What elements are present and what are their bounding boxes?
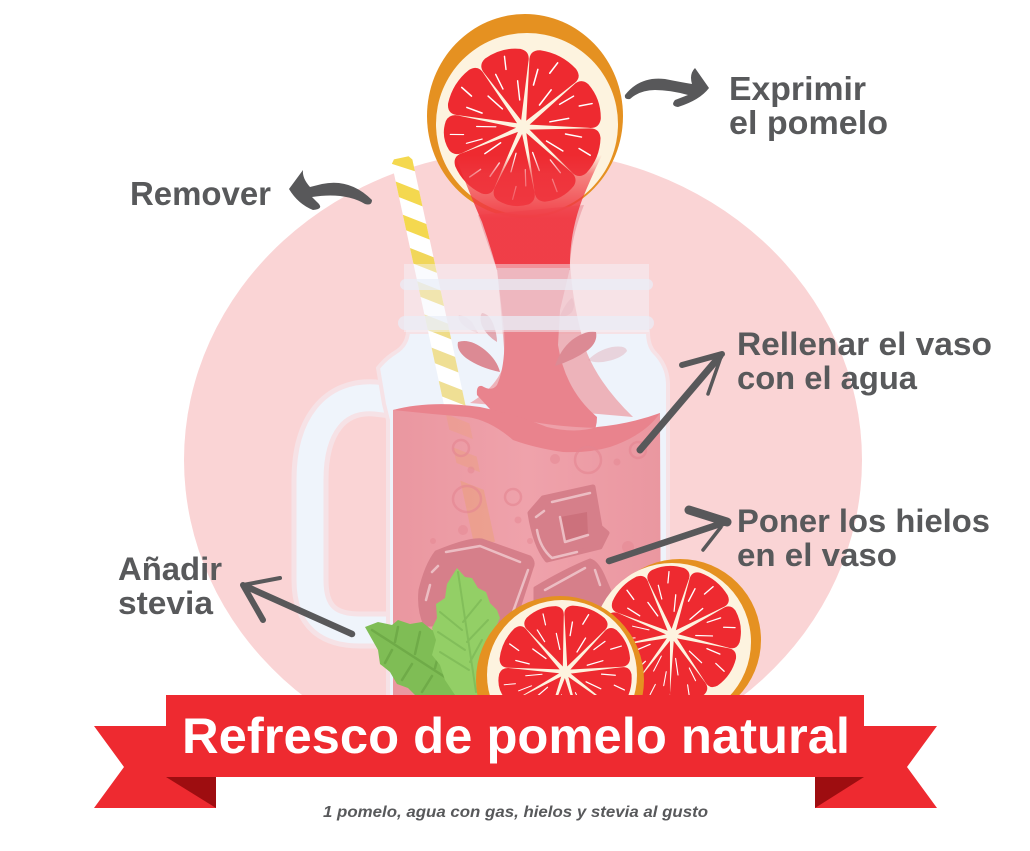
bubbles: [430, 454, 634, 553]
label: squeeze: el pomelo: [729, 104, 888, 141]
leaf light: [432, 568, 500, 695]
liquid in the jar: [393, 405, 661, 705]
grapefruit half back: [588, 550, 761, 721]
leaf dark: [365, 620, 470, 695]
arrow: squeeze: [625, 68, 709, 107]
arrow: add stevia: [243, 578, 352, 634]
label: stir: Remover: [130, 175, 271, 212]
splash drops: [458, 298, 627, 372]
label: squeeze: Exprimir: [729, 70, 866, 107]
arrow: fill with water: [640, 354, 722, 450]
label: add ice: en el vaso: [737, 537, 897, 573]
label: fill with water: con el agua: [737, 360, 917, 396]
grapefruit half front: [476, 594, 644, 764]
label: add stevia: stevia: [118, 585, 213, 621]
icon: squeezed grapefruit: [427, 14, 623, 218]
striped straw: [391, 156, 496, 551]
arrow: add ice: [609, 510, 727, 561]
ice cube left: [420, 540, 533, 625]
juice stream lower: [477, 268, 597, 448]
arrow: stir: [289, 170, 372, 210]
title: Refresco de pomelo natural: [182, 708, 850, 764]
label: add stevia: Añadir: [118, 551, 222, 587]
label: fill with water: Rellenar el vaso: [737, 326, 992, 362]
liquid wave surface: [393, 404, 660, 452]
subtitle: 1 pomelo, agua con gas, hielos y stevia al gusto: [323, 804, 708, 821]
label: add ice: Poner los hielos: [737, 503, 990, 539]
pink background circle: [184, 150, 862, 770]
jar handle: [310, 398, 392, 630]
submerged straw: [446, 410, 495, 546]
jar glass body: [378, 332, 668, 705]
ice cube right: [535, 560, 613, 625]
juice stream upper: [455, 155, 602, 270]
jar lip and neck: [398, 264, 654, 332]
ice cube top: [530, 487, 607, 560]
ribbon banner: [94, 695, 937, 808]
juice stream halo: [470, 205, 633, 417]
bubble rings: [453, 440, 646, 512]
